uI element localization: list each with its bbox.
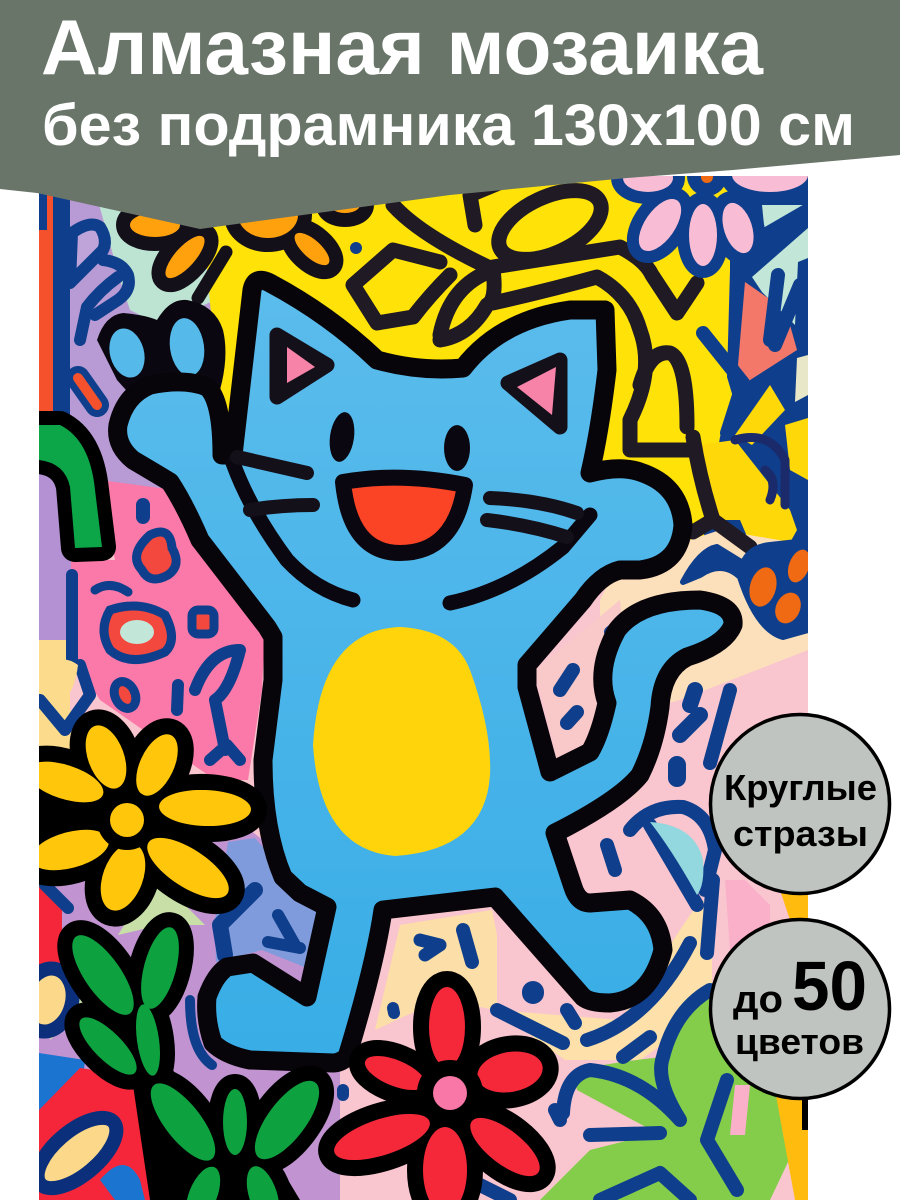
black plant stem xyxy=(130,1065,300,1200)
navy blob with orange spots xyxy=(683,540,815,637)
orange spots xyxy=(749,550,808,624)
cream petals bottom-left xyxy=(39,962,124,1196)
orange flower top-left xyxy=(130,192,360,284)
red brush mark inside navy outline xyxy=(78,378,97,405)
background colour fields xyxy=(39,170,808,1200)
badge: round rhinestones: стразы xyxy=(733,813,868,854)
badge: up to 50 colours: до xyxy=(733,979,783,1021)
badge: up to 50 colours: 50 xyxy=(792,947,867,1025)
cat chin line xyxy=(233,463,590,603)
header banner xyxy=(0,0,900,229)
cat whiskers xyxy=(237,457,577,537)
cat eyes xyxy=(327,411,470,471)
small navy dot xyxy=(350,242,362,254)
cat body outline xyxy=(118,280,733,1063)
blue petal bottom-left xyxy=(100,1165,145,1200)
cat ear right xyxy=(508,360,560,427)
subtitle: без подрамника 130х100 см xyxy=(42,93,855,158)
top-right flower xyxy=(623,156,808,266)
red brush mark xyxy=(78,378,97,405)
icon: green arch xyxy=(30,425,102,548)
small pink-field flowers xyxy=(104,532,214,712)
flower: yellow xyxy=(22,720,252,917)
badge: round rhinestones: Круглые xyxy=(724,767,877,808)
panel: painting xyxy=(17,156,815,1200)
orange strip edge mark xyxy=(802,1100,808,1130)
left side doodles xyxy=(40,225,440,1095)
title: Алмазная мозаика xyxy=(41,3,764,91)
badge: round rhinestones xyxy=(710,714,890,894)
pale drop bottom-left xyxy=(66,660,78,692)
cat belly xyxy=(313,627,490,856)
doodle line by flower xyxy=(198,252,226,298)
cat ear left xyxy=(277,335,327,397)
mint dot in flower xyxy=(120,620,154,644)
badge: up to 50 colours xyxy=(710,920,890,1098)
flower: green plants xyxy=(61,923,330,1200)
cat xyxy=(97,280,733,1063)
cat mouth xyxy=(343,478,465,553)
badge: up to 50 colours: цветов xyxy=(735,1021,864,1062)
pale blue leaf xyxy=(650,822,703,895)
navy shapes right side xyxy=(463,210,808,1200)
cat paw toes xyxy=(97,300,225,400)
dark doodles in yellow field xyxy=(353,170,750,547)
flower: red xyxy=(329,987,549,1200)
